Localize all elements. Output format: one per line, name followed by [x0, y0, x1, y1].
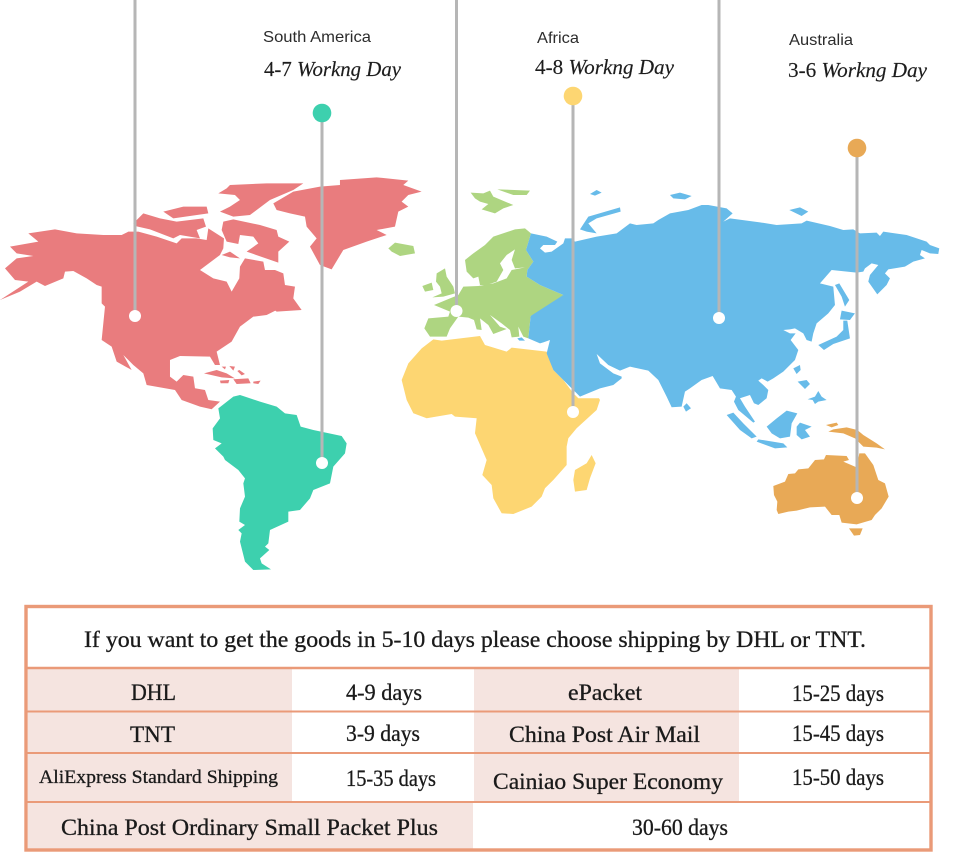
pin: North America: [129, 0, 141, 322]
table cell shading: [28, 669, 739, 849]
row: TNT: TNT: [130, 722, 175, 747]
row: DHL: DHL: [131, 680, 176, 705]
row: AliExpress Standard Shipping: 15-35 days: [346, 766, 436, 791]
row: China Post Ordinary Small Packet Plus: 30-60 days: [632, 815, 728, 840]
pin: Europe: [450, 0, 462, 317]
label: Africa: 4-8 Workng Day: [535, 55, 675, 79]
label: Australia: [788, 32, 928, 82]
pin: Africa: [564, 87, 582, 418]
pin: Asia: [713, 0, 725, 324]
row: China Post Ordinary Small Packet Plus: China Post Ordinary Small Packet Plus: [61, 815, 438, 840]
row: DHL: [131, 680, 422, 705]
pin: Australia: [848, 139, 866, 504]
shipping table: [26, 606, 931, 850]
row: China Post Air Mail: China Post Air Mail: [509, 722, 700, 747]
row: ePacket: ePacket: [568, 680, 643, 705]
map: North America: [0, 177, 422, 409]
row: Cainiao Super Economy: 15-50 days: [792, 765, 884, 790]
map: Asia: [517, 190, 939, 423]
row: Cainiao Super Economy: [493, 765, 884, 794]
label: South America: 4-7 Workng Day: [264, 57, 402, 81]
label: Australia: 3-6 Workng Day: [788, 58, 928, 82]
row: DHL: 4-9 days: [346, 680, 422, 705]
row: ePacket: [568, 680, 884, 706]
row: TNT: 3-9 days: [346, 721, 420, 746]
label: Africa: [535, 30, 675, 79]
map: Australia: [773, 423, 889, 536]
table borders: [26, 606, 931, 850]
row: China Post Air Mail: 15-45 days: [792, 721, 884, 746]
row: ePacket: 15-25 days: [792, 681, 884, 706]
map: South America: [213, 395, 347, 570]
map: Southeast Asian islands: [727, 411, 812, 448]
map: Africa: [402, 336, 600, 514]
label: Australia: Australia: [789, 32, 853, 49]
label: South America: [263, 29, 402, 81]
row: TNT: [130, 721, 420, 747]
row: AliExpress Standard Shipping: [39, 766, 436, 791]
row: Cainiao Super Economy: Cainiao Super Economy: [493, 769, 723, 794]
label: South America: South America: [263, 29, 371, 46]
row: AliExpress Standard Shipping: AliExpress Standard Shipping: [39, 767, 279, 788]
row: China Post Ordinary Small Packet Plus: [61, 815, 728, 840]
pin: South America: [313, 104, 331, 469]
table heading note: If you want to get the goods in 5-10 days please choose shipping by DHL or TNT.: [84, 627, 866, 652]
row: China Post Air Mail: [509, 721, 884, 747]
map: Europe: [388, 189, 563, 338]
label: Africa: Africa: [537, 30, 579, 47]
